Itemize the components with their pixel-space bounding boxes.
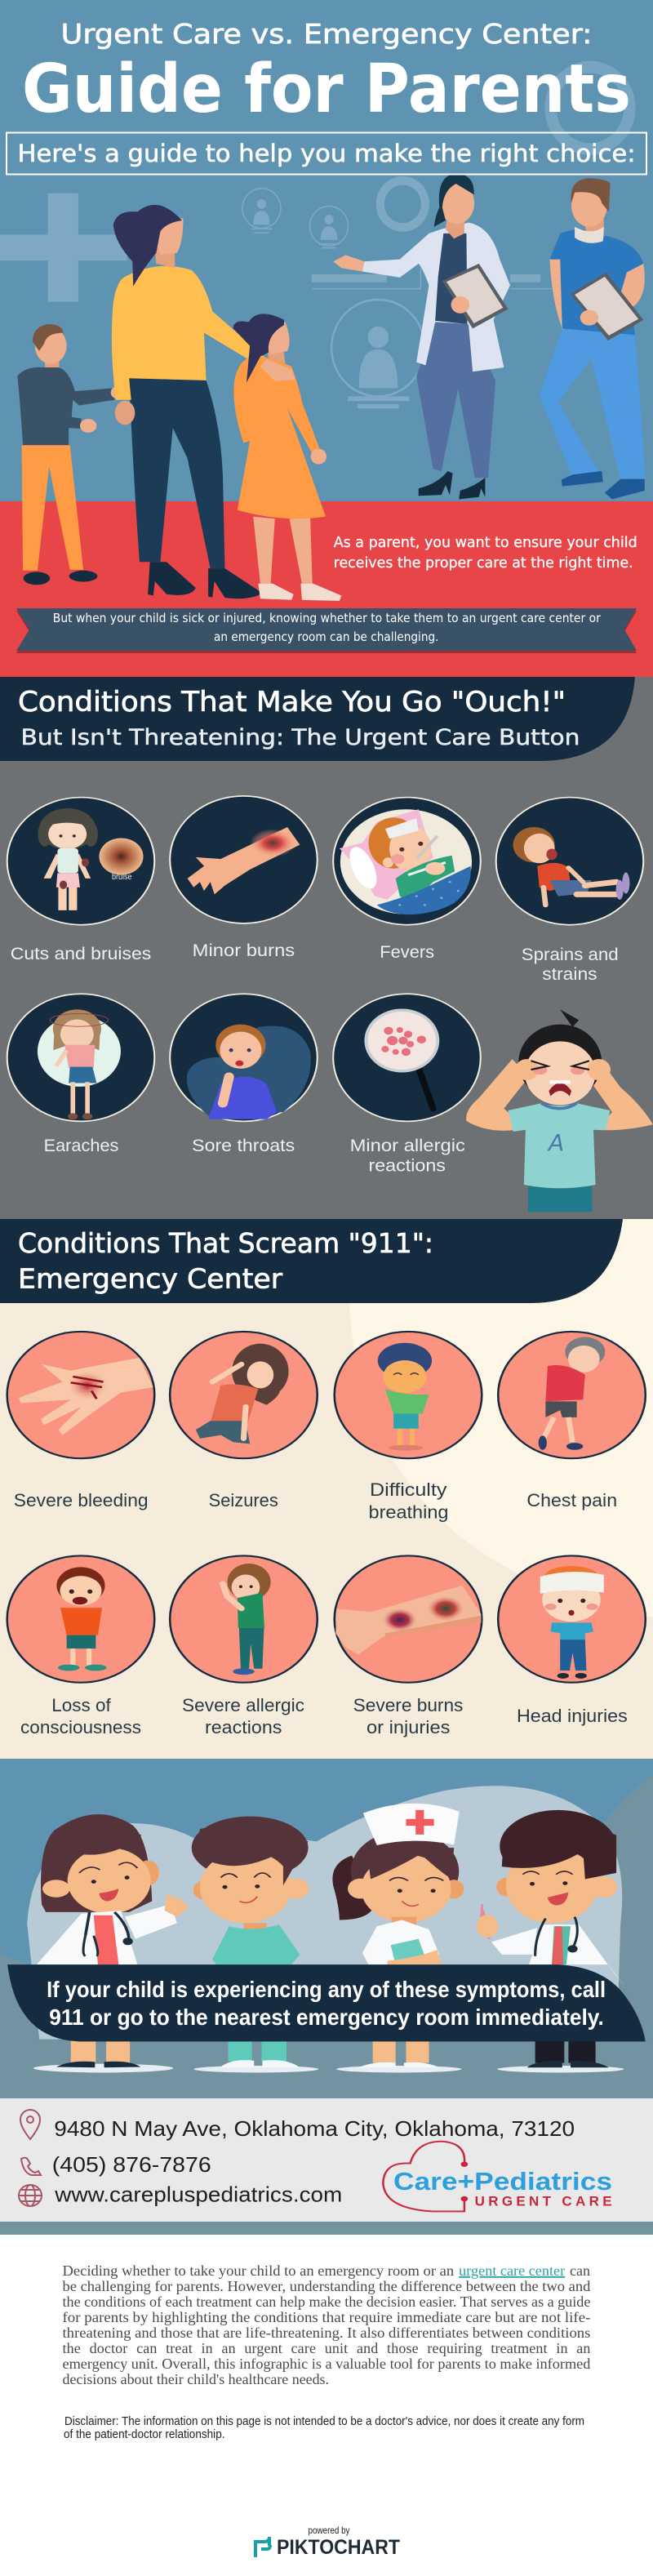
character: nurse: [332, 1804, 464, 2067]
icon: sprained boy: [513, 827, 629, 905]
text block: disclaimer: of the patient-doctor relationship.: [64, 2427, 225, 2441]
icon: location pin: [20, 2110, 40, 2139]
figure: boy: [17, 324, 122, 585]
figure: girl: [233, 314, 341, 601]
text block: summary paragraph: emergency unit. Overall, this infographic is a valuable tool for parents to make informed: [62, 2356, 590, 2372]
condition labels: emergency: Seizures: [209, 1490, 278, 1510]
icon: phone: [21, 2158, 41, 2175]
text block: summary paragraph: the doctor can treat in an urgent care unit and those requiring treatment in an: [62, 2340, 590, 2356]
condition labels: urgent care: [11, 873, 619, 1176]
condition labels: urgent care: Cuts and bruises: [11, 945, 151, 963]
logo: Care+Pediatrics Urgent Care: [383, 2142, 612, 2211]
text: letter on shirt: A: [547, 1129, 564, 1156]
logo: Care+Pediatrics Urgent Care: Care+Pediatrics: [393, 2167, 612, 2196]
icon: magnifier allergic rash: [366, 1010, 438, 1109]
text: parent intro: As a parent, you want to ensure your child: [334, 534, 637, 551]
text block: summary paragraph: can: [570, 2262, 590, 2279]
text: website: www.carepluspediatrics.com: [54, 2182, 342, 2206]
panel: hero: [0, 0, 653, 678]
illustration: medical team: [0, 1776, 653, 2098]
condition labels: urgent care: Minor burns: [193, 941, 295, 960]
text block: summary paragraph: the conditions of each treatment can help make the decision easier. That serves as a guide: [62, 2293, 590, 2310]
icon: fever boy: [340, 809, 472, 914]
text block: disclaimer: Disclaimer: The information on this page is not intended to be a doctor's advice, nor does it create any form: [64, 2414, 584, 2428]
section heading: urgent care: Conditions That Make You Go "Ouch!": [18, 686, 566, 719]
character: male doctor: [477, 1810, 624, 2067]
logo: Care+Pediatrics Urgent Care: URGENT CARE: [475, 2193, 612, 2209]
hero illustration: family and clinicians: [0, 67, 646, 601]
condition labels: emergency: [14, 1479, 628, 1737]
section heading: emergency center: Emergency Center: [18, 1263, 282, 1295]
icon: severe burn arm: [335, 1586, 481, 1654]
text block: summary paragraph: [62, 2262, 590, 2387]
condition labels: urgent care: Fevers: [380, 943, 434, 962]
text: parent intro: receives the proper care at the right time.: [334, 554, 633, 572]
icon: minor burn arm: [188, 827, 300, 894]
text block: summary paragraph: decisions about their child's healthcare needs.: [62, 2371, 329, 2387]
text block: summary paragraph: be challenging for parents. However, understanding the difference between the two and: [62, 2278, 590, 2294]
condition labels: urgent care: reactions: [369, 1156, 446, 1176]
text block: summary paragraph: for parents by highlighting the conditions that require immediate care but are not life-: [62, 2309, 590, 2325]
condition labels: emergency: consciousness: [20, 1717, 141, 1737]
icon: allergic boy: [223, 1564, 271, 1675]
callout banner: 911 or go to the nearest emergency room immediately.: [49, 2004, 604, 2030]
subtitle box: Here's a guide to help you make the right choice:: [18, 140, 635, 167]
icon: earache girl: [38, 1009, 121, 1119]
ribbon banner: [16, 608, 637, 653]
section heading: urgent care: But Isn't Threatening: The Urgent Care Button: [21, 725, 580, 750]
condition labels: emergency: Loss of: [51, 1695, 112, 1715]
condition labels: emergency: Head injuries: [517, 1706, 628, 1726]
powered by Piktochart: [255, 2525, 400, 2559]
ribbon banner: an emergency room can be challenging.: [214, 630, 439, 644]
panel: contact details: [0, 2098, 653, 2235]
icon: chest pain boy: [539, 1337, 605, 1450]
panel: emergency conditions: [0, 1219, 653, 1759]
text block: disclaimer: [64, 2414, 584, 2441]
text: phone number: (405) 876-7876: [52, 2152, 211, 2177]
text block: summary paragraph: threatening and those that are life-threatening. It also differentiates between conditions: [62, 2325, 590, 2341]
condition labels: urgent care: strains: [542, 965, 597, 984]
figure: crying boy covering ears: [466, 1009, 653, 1212]
condition labels: emergency: Chest pain: [526, 1490, 617, 1510]
title: Urgent Care vs. Emergency Center:: [60, 18, 593, 50]
callout banner: [7, 1964, 646, 2041]
icon: seizure girl: [196, 1344, 289, 1444]
figure: female doctor: [333, 174, 510, 499]
icon: globe: [19, 2185, 42, 2206]
condition labels: urgent care: bruise: [112, 873, 132, 882]
callout banner: If your child is experiencing any of these symptoms, call: [47, 1977, 606, 2002]
condition labels: emergency: Severe allergic: [182, 1695, 304, 1715]
character: boy in green scrubs: [192, 1817, 309, 2067]
figure: male nurse: [540, 178, 646, 499]
panel: urgent care conditions: [0, 677, 653, 1219]
condition labels: emergency: Severe burns: [353, 1695, 463, 1715]
section heading: emergency center: [0, 1219, 623, 1303]
icon: unconscious boy: [56, 1567, 107, 1671]
panel: call to action: [0, 1759, 653, 2098]
text block: summary paragraph: Deciding whether to take your child to an emergency room or an: [62, 2262, 454, 2279]
condition labels: urgent care: Sprains and: [522, 945, 619, 964]
condition icons: urgent care: [7, 796, 643, 1121]
title: [22, 18, 631, 128]
condition labels: emergency: reactions: [205, 1717, 282, 1737]
powered by Piktochart: PIKTOCHART: [277, 2536, 400, 2559]
icon: bleeding hand: [19, 1358, 153, 1435]
condition labels: emergency: breathing: [369, 1502, 449, 1522]
text block: summary paragraph: urgent care center: [459, 2262, 565, 2279]
icon: sore throat boy: [187, 1025, 311, 1119]
icon: bruised girl: [38, 808, 144, 910]
subtitle box: [7, 132, 646, 175]
condition labels: urgent care: Minor allergic: [350, 1137, 465, 1155]
condition labels: urgent care: Earaches: [44, 1137, 118, 1155]
condition labels: emergency: Severe bleeding: [14, 1490, 149, 1510]
condition labels: emergency: Difficulty: [370, 1479, 446, 1500]
text: address: 9480 N May Ave, Oklahoma City, Oklahoma, 73120: [54, 2116, 575, 2141]
section heading: emergency center: Conditions That Scream "911":: [18, 1227, 433, 1259]
ribbon banner: But when your child is sick or injured, knowing whether to take them to an urgent care center or: [53, 611, 601, 625]
text: parent intro: [334, 534, 637, 572]
character: female doctor: [37, 1814, 189, 2067]
powered by Piktochart: powered by: [309, 2525, 349, 2536]
section heading: urgent care: [0, 677, 635, 761]
condition icons: emergency: [7, 1332, 646, 1683]
condition labels: emergency: or injuries: [366, 1717, 451, 1737]
condition labels: urgent care: Sore throats: [192, 1137, 295, 1155]
icon: breathing boy: [378, 1343, 432, 1451]
icon: head injury boy: [540, 1566, 604, 1679]
panel: footer: [0, 2235, 653, 2576]
figure: mother: [112, 205, 267, 598]
